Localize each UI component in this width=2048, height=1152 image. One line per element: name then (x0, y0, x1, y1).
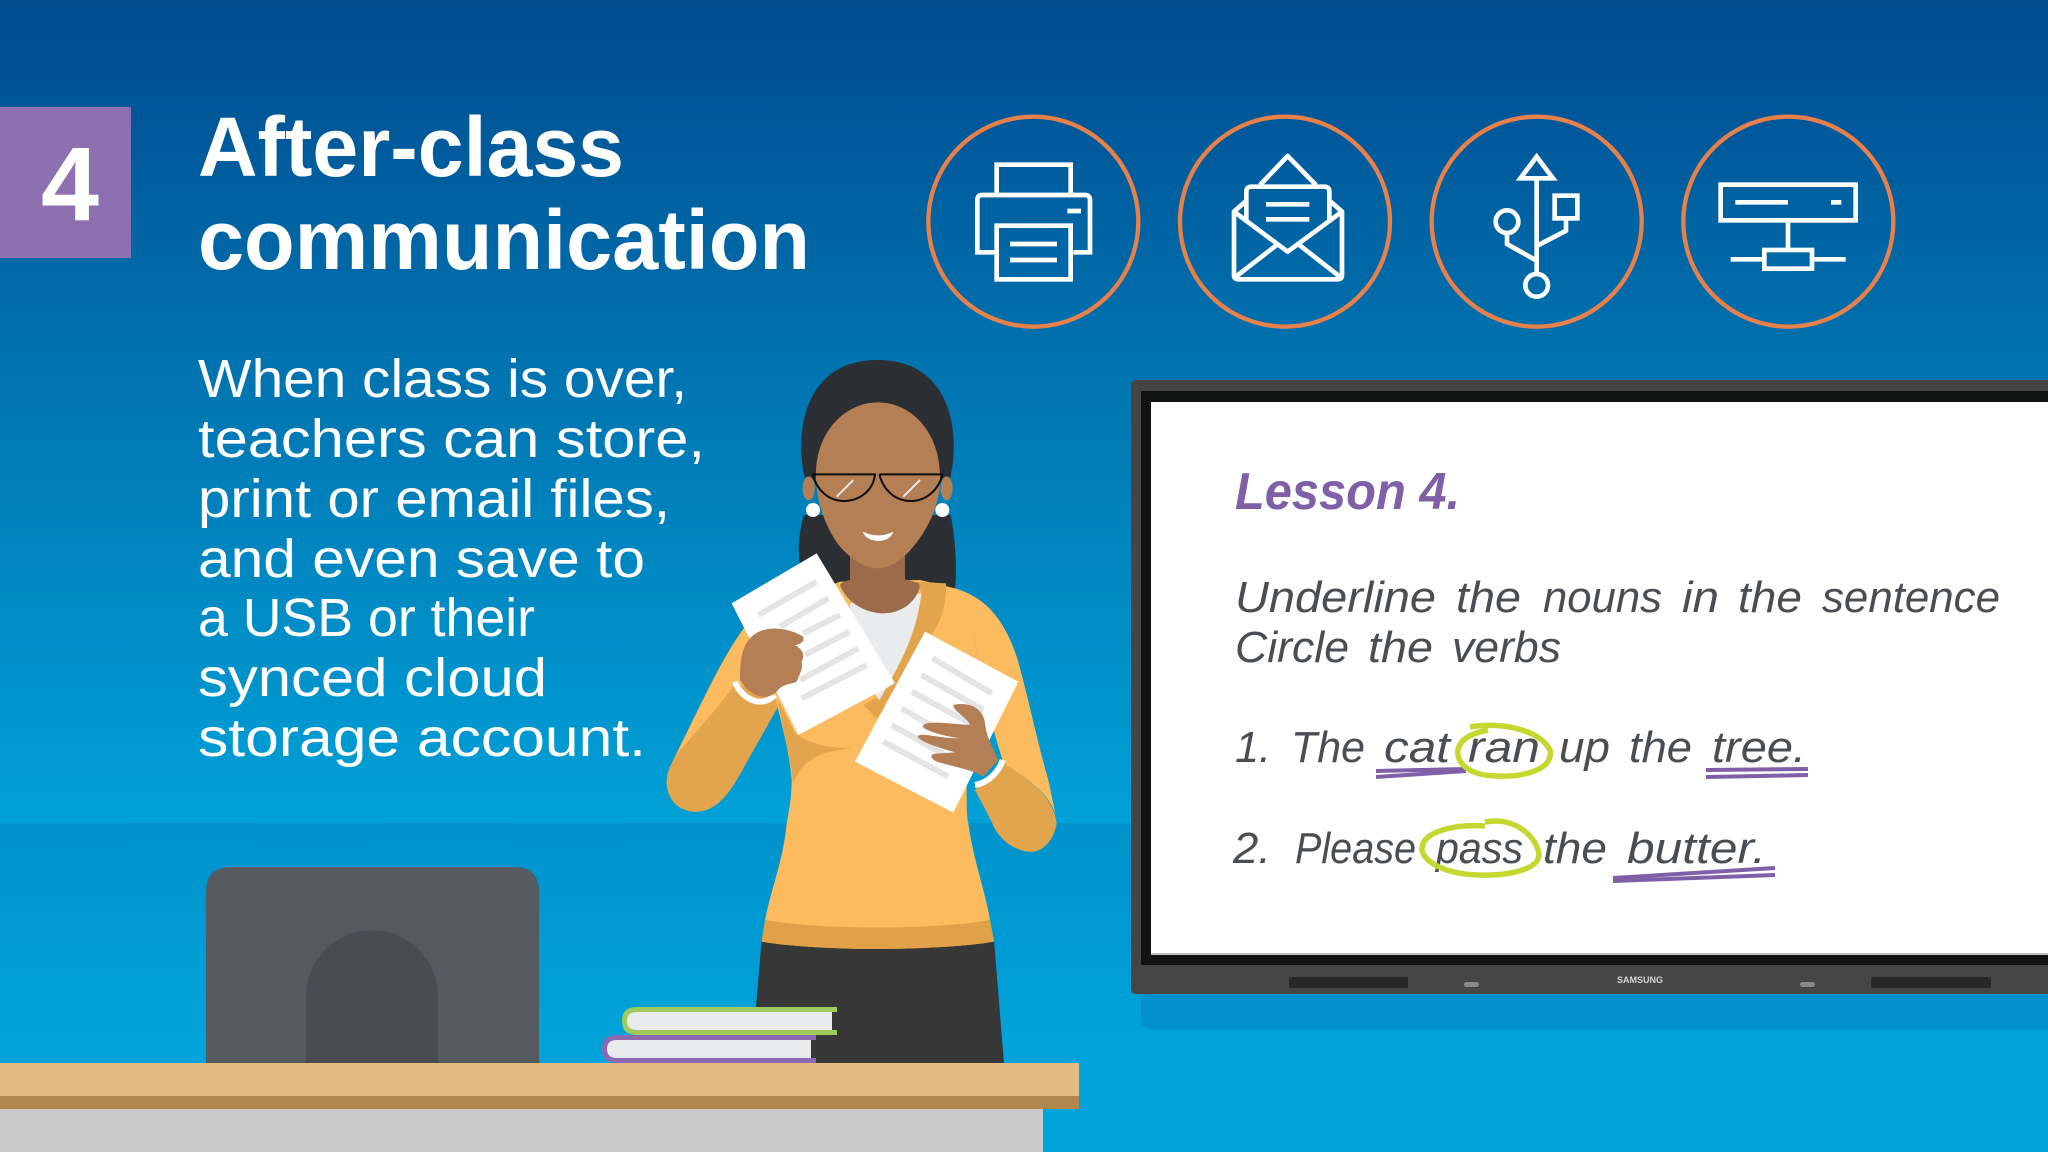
instructions: the (1738, 573, 1802, 622)
icon: open envelope (1180, 117, 1390, 327)
left hand (735, 629, 804, 702)
skirt (753, 940, 1004, 1063)
right paper (855, 632, 1018, 813)
title: After-class (198, 100, 624, 194)
body text: a USB or their (198, 588, 535, 648)
body text: When class is over, (198, 349, 687, 409)
title: communication (198, 193, 810, 287)
sentence 1: tree. (1712, 723, 1806, 772)
icon: printer (928, 117, 1138, 327)
teacher figure (667, 360, 1057, 1063)
hair (799, 360, 956, 593)
lesson heading: Lesson 4. (1235, 463, 1460, 521)
body text: synced cloud (198, 648, 547, 708)
glasses (812, 474, 943, 501)
smile (863, 532, 893, 541)
sentence 2: Please (1295, 824, 1416, 873)
face (803, 402, 953, 568)
body text: storage account. (198, 708, 646, 768)
instructions: verbs (1452, 623, 1561, 672)
sentence 1: ran (1468, 723, 1540, 772)
sentence 1: cat (1384, 723, 1452, 772)
number badge: 4 (41, 126, 99, 243)
instructions: the (1456, 573, 1521, 622)
sentence 2: 2. (1232, 824, 1271, 873)
sentence 1: The (1291, 723, 1365, 772)
body text: and even save to (198, 529, 645, 589)
white shirt (850, 593, 922, 702)
collar (878, 582, 946, 707)
sentence 2: pass (1434, 824, 1523, 873)
chair (206, 867, 539, 1063)
desk (0, 1063, 1079, 1152)
purple underlines (1376, 769, 1808, 881)
sentence 1 (1235, 723, 1806, 772)
body text: teachers can store, (198, 409, 705, 469)
right hand (918, 704, 1003, 785)
icon: server network (1683, 117, 1893, 327)
neck (840, 553, 921, 613)
speakers and sensors (1289, 977, 1991, 988)
instructions: Circle (1235, 623, 1349, 672)
instructions: Underline (1235, 573, 1436, 622)
sentence 2: butter. (1627, 824, 1766, 873)
brand label: SAMSUNG (1617, 975, 1663, 985)
icon: usb (1432, 117, 1642, 327)
instructions: the (1368, 623, 1433, 672)
sentence 1: the (1629, 723, 1692, 772)
body text (198, 349, 705, 768)
earrings (806, 503, 949, 517)
sentence 2 (1232, 824, 1766, 873)
sweater torso (753, 580, 1010, 949)
sentence 1: up (1559, 723, 1610, 772)
right sleeve (955, 588, 1057, 852)
instructions: sentence (1822, 573, 2000, 622)
instructions: in (1682, 573, 1719, 622)
body text: print or email files, (198, 469, 670, 529)
green verb circles (1422, 725, 1550, 875)
interactive display (1131, 380, 2048, 1030)
books (602, 1007, 837, 1063)
sentence 2: the (1543, 824, 1607, 873)
number badge (0, 107, 131, 258)
sentence 1: 1. (1235, 723, 1271, 772)
left paper (732, 553, 895, 735)
title (198, 100, 810, 287)
instructions: nouns (1543, 573, 1662, 622)
instructions (1235, 573, 2000, 672)
left sleeve (667, 617, 793, 812)
